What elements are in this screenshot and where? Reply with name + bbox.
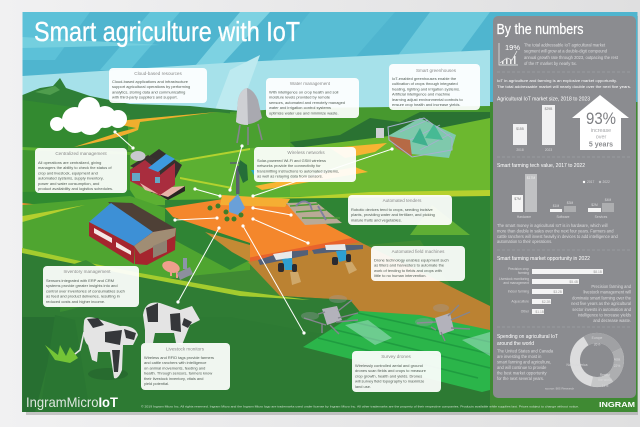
bar chart: market opportunity: $5.4B (569, 280, 579, 284)
callout: survey drones: will survey field topography to maximize (355, 379, 425, 384)
text: precision farming summary: sector invests in automation and (572, 307, 632, 312)
text: spending summary: The United States and Canada (497, 348, 554, 354)
bar chart: market opportunity: Aquaculture (511, 300, 529, 304)
bar chart: market opportunity: Precision crop (508, 267, 529, 271)
callout: livestock monitors: their livestock inventory, vitals and (144, 376, 203, 381)
callout: inventory management: Sensors integrated with ERP and CRM (46, 278, 114, 283)
callout: livestock monitors (141, 343, 230, 390)
icon: cow left (45, 317, 138, 380)
text: hardware summary: more than double in sales over the next four years. Farmers and (497, 228, 614, 233)
callout: wireless networks (254, 147, 356, 182)
text: market growth summary: segment will grow at a double-digit compound (524, 49, 608, 54)
icon: barn (89, 202, 176, 265)
callout: wireless networks: as well as relaying data from sensors. (257, 174, 323, 179)
callout: centralized management: Centralized management (55, 151, 107, 156)
callout: inventory management: reduced costs and higher income. (46, 299, 105, 304)
callout: automated tenders (348, 195, 452, 225)
text: precision farming summary (571, 284, 632, 323)
text: spending summary: smart farming and agriculture, (497, 360, 551, 364)
callout: centralized management: product availability and logistics schedules. (38, 186, 113, 191)
bar chart: market opportunity: $1.1B (535, 310, 545, 314)
bar chart: market opportunity: Livestock monitoring (499, 277, 529, 281)
text: precision farming summary: and decrease waste. (593, 318, 631, 323)
callout: water management: Water management (290, 81, 331, 86)
donut chart: spending by region: the world (598, 378, 612, 382)
callout arrow: 93% increase: 5 years (589, 142, 613, 148)
text: precision farming summary: dominate smart farming over the (572, 295, 632, 300)
callout: water management: water and irrigation control systems (269, 105, 331, 110)
callout: smart greenhouses: Smart greenhouses (416, 68, 457, 73)
bar chart: tech value (512, 174, 614, 219)
callout: water management (266, 78, 359, 118)
callout: smart greenhouses: Artificial intelligence and machine (392, 92, 451, 97)
text: market growth summary: The total addressable IoT agricultural market (524, 42, 606, 48)
callout: survey drones (352, 351, 441, 392)
callout: automated field machines: as tillers and harvesters to automate the (374, 263, 445, 268)
callout: centralized management: automated systems, supply inventory, (38, 176, 104, 181)
text: hardware summary: automation to their operations. (497, 239, 552, 244)
text: precision farming summary: intelligence to increase yields (578, 312, 631, 318)
crop field (303, 311, 490, 392)
callout: cloud-based resources: Cloud-based resources (134, 71, 182, 76)
callout: automated field machines: Drone technology enables equipment such (374, 258, 449, 262)
callout: cloud-based resources (109, 68, 207, 103)
bar chart: market size: $15B (516, 127, 525, 131)
donut chart: spending by region: Asia (614, 358, 620, 362)
callout: automated tenders: mature fruits and vegetables. (351, 217, 402, 222)
heading: spending: around the world (497, 341, 534, 347)
icon: tractors (258, 244, 363, 285)
bar chart: market size: 2023 (545, 148, 552, 152)
logo: Ingram Micro IoT: IngramMicroIoT (26, 394, 118, 410)
bar chart: market opportunity: farming (518, 271, 529, 275)
text: market growth summary (524, 42, 619, 66)
bar chart: tech value: $4M (605, 198, 611, 202)
bar chart: market opportunity: Indoor farming (508, 290, 529, 294)
callout: automated tenders: Automated tenders (383, 198, 422, 203)
callout: cloud-based resources: Cloud-based applications and infrastructure (112, 79, 189, 84)
callout arrow: 93% increase: increase (591, 128, 611, 134)
text: market growth summary: annual growth rate through 2023, outpacing the rest (524, 55, 619, 60)
bar chart: market opportunity: Other (521, 310, 530, 314)
callout arrow: 93% increase: 93% (586, 109, 616, 128)
callout: survey drones: crop growth, health and yields. Drones (355, 373, 422, 378)
callout arrow: 93% increase: over (596, 134, 606, 140)
heading: market opportunity: Smart farming market opportunity in 2022 (497, 256, 590, 262)
heading: by the numbers: By the numbers (496, 22, 584, 38)
heading: tech value: Smart farming tech value, 2017 to 2022 (497, 163, 585, 169)
bar chart: tech value: $17M (527, 176, 535, 180)
callout: cloud-based resources: analytics, storing data and communicating (112, 89, 185, 94)
heading: spending (497, 334, 558, 347)
text: market opportunity: The total addressable market will nearly double over the next five years. (497, 84, 631, 89)
callout: inventory management: systems provide greater insights into and (46, 283, 118, 288)
title: Smart agriculture with IoT (34, 16, 300, 47)
callout: automated tenders: Robotic devices tend to crops, seeding incisive (351, 207, 433, 212)
text: spending summary: are investing the most in (497, 354, 542, 359)
bar chart: market size: 2018 (516, 148, 524, 152)
icon: cow right (143, 302, 200, 345)
donut chart: spending by region: Rest of (600, 373, 610, 377)
text: hardware summary: cattle ranchers will invest heavily in devices to add intelligence and (497, 234, 619, 239)
text: market opportunity (497, 78, 631, 89)
bar chart: tech value: 2017 (587, 180, 595, 184)
text: spending summary (497, 348, 554, 381)
donut chart: spending by region: 38% (574, 370, 580, 374)
callout: cloud-based resources: with third-party suppliers and support. (112, 95, 178, 100)
bar chart: tech value: Software (556, 215, 570, 219)
callout: inventory management: Inventory management (64, 269, 111, 274)
cloud (50, 97, 127, 135)
callout: survey drones: Wirelessly controlled aerial and ground (355, 363, 423, 368)
bar chart: tech value: Services (595, 215, 608, 219)
donut chart: spending by region: North America (567, 363, 588, 367)
callout: smart greenhouses (389, 64, 480, 110)
callout: centralized management: All operations are centralized, giving (38, 160, 101, 165)
text: source: source: BIS Research (545, 386, 575, 390)
callout: automated field machines (371, 246, 465, 281)
callout: livestock monitors: on animal movements, feeding and (144, 365, 205, 370)
callout: smart greenhouses: ensure crop health and increase yields. (392, 102, 461, 107)
heading: spending: Spending on agricultural IoT (497, 334, 558, 340)
callout: cloud-based resources: support agricultural operations by performing (112, 84, 190, 89)
donut chart: spending by region: 14% (602, 384, 608, 388)
callout: survey drones: drones scan fields and crops to measure (355, 368, 427, 373)
donut chart: spending by region (567, 330, 627, 390)
donut chart: spending by region: 26% (594, 342, 600, 346)
callout: livestock monitors: Livestock monitors (166, 346, 205, 352)
callout: centralized management (35, 148, 127, 193)
callout: water management: With intelligence on crop health and soil (269, 90, 339, 94)
callout: livestock monitors: health. Through sensors, farmers know (144, 371, 212, 376)
callout: wireless networks: Wireless networks (287, 150, 325, 155)
donut chart: spending by region: Europe (592, 336, 602, 340)
text: precision farming summary: Precision farming and (591, 284, 632, 289)
panel: by the numbers (493, 16, 636, 398)
callout: centralized management: managers the ability to check the status of (38, 165, 112, 170)
bar chart: market opportunity: $8.1B (593, 270, 603, 274)
icon: water tower (236, 88, 262, 145)
text: precision farming summary: livestock management will (583, 290, 631, 295)
callout: inventory management (43, 266, 139, 307)
bar chart: tech value: $1M (553, 204, 559, 208)
callout: smart greenhouses: IoT-enabled greenhouses enable the (392, 76, 457, 81)
bar chart: tech value: $3M (567, 201, 573, 205)
callout: water management: moisture levels provided by remote (269, 95, 331, 100)
bar chart: tech value: 2022 (602, 180, 610, 184)
bar chart: tech value: $7M (514, 197, 521, 201)
callout: water management: sensors, automated and remotely managed (269, 100, 345, 105)
text: hardware summary: The smart money in agricultural IoT is in hardware, which will (497, 223, 608, 228)
bar chart: tech value: Hardware (517, 215, 531, 219)
connector lines (113, 130, 394, 335)
text: hardware summary (497, 223, 619, 244)
icon: growth chart with 19%: 19% (505, 43, 520, 52)
donut chart: spending by region: 22% (614, 364, 620, 368)
icon: drones (301, 295, 470, 341)
callout: wireless networks: networks provide the connectivity for (257, 163, 321, 168)
callout: wireless networks: transmitting instructions to automated systems, (257, 168, 339, 173)
text: market growth summary: of the IT market by nearly 5x. (524, 61, 577, 66)
callout: survey drones: land use. (355, 384, 371, 389)
icon: pig and feeder (161, 258, 193, 280)
callout: smart greenhouses: heating, lighting and irrigation systems. (392, 86, 460, 91)
text: precision farming summary: next five years as the agricultural (571, 301, 631, 306)
text: spending summary: and will continue to provide (497, 365, 547, 370)
callout: automated tenders: plants, providing water and fertilizer, and picking (351, 212, 435, 217)
callout: livestock monitors: Wireless and RFID tags provide farmers (144, 355, 214, 360)
callout: inventory management: control over inventories of consumables such (46, 288, 125, 293)
bar chart: market size (513, 105, 555, 152)
callout: automated field machines: work of tending to fields and crops with (374, 268, 442, 273)
icon: automated tender rows (286, 201, 342, 225)
icon: growth chart with 19% (499, 43, 520, 65)
callout: automated field machines: little to no human intervention. (374, 273, 427, 278)
bar chart: market opportunity (499, 267, 603, 314)
callout: centralized management: power and water consumption, and (38, 181, 99, 186)
callout: inventory management: as feed and product deliveries, resulting in (46, 294, 120, 299)
bar chart: market opportunity: $2.2B (542, 300, 551, 304)
icon: weather station (208, 160, 259, 222)
icon: farmhouse (130, 149, 185, 200)
bar chart: market opportunity: $3.2B (553, 290, 563, 294)
callout: smart greenhouses: learning adjust environmental controls to (392, 97, 464, 102)
text: market opportunity: IoT in agriculture and farming is an explosive market opportunity. (497, 78, 617, 83)
callout: wireless networks: Solar-powered Wi-Fi and GSM wireless (257, 158, 326, 163)
callout: water management: optimize water use and minimize waste. (269, 110, 339, 115)
callout: survey drones: Survey drones (381, 354, 412, 359)
text: spending summary: the best market opportunity (497, 370, 548, 376)
logo: Ingram: INGRAM (599, 400, 635, 409)
callout: automated field machines: Automated field machines (392, 249, 445, 254)
bar chart: market size: $29B (545, 107, 553, 111)
bar chart: tech value: $2M (591, 203, 598, 207)
callout arrow: 93% increase (572, 95, 629, 150)
text: spending summary: for the next several years. (497, 376, 544, 381)
callout: centralized management: crop and livestock, equipment and (38, 170, 98, 175)
heading: market size: Agricultural IoT market size, 2018 to 2023 (497, 96, 590, 102)
bar chart: market opportunity: and management (503, 281, 529, 285)
icon: greenhouse (376, 118, 456, 158)
callout: smart greenhouses: cultivation of crops through integrated (392, 81, 458, 86)
callout: livestock monitors: yield potential. (144, 381, 169, 386)
footnote legal text: © 2019 Ingram Micro Inc. All rights reserved. Ingram Micro and the Ingram Micro logo are trademarks used under license by Ingram Micro Inc. All other trademarks are the property of their respective companies. Products available while supplies last. Prices subject to change without notice. (141, 404, 579, 408)
callout: livestock monitors: and cattle ranchers with intelligence (144, 360, 207, 365)
